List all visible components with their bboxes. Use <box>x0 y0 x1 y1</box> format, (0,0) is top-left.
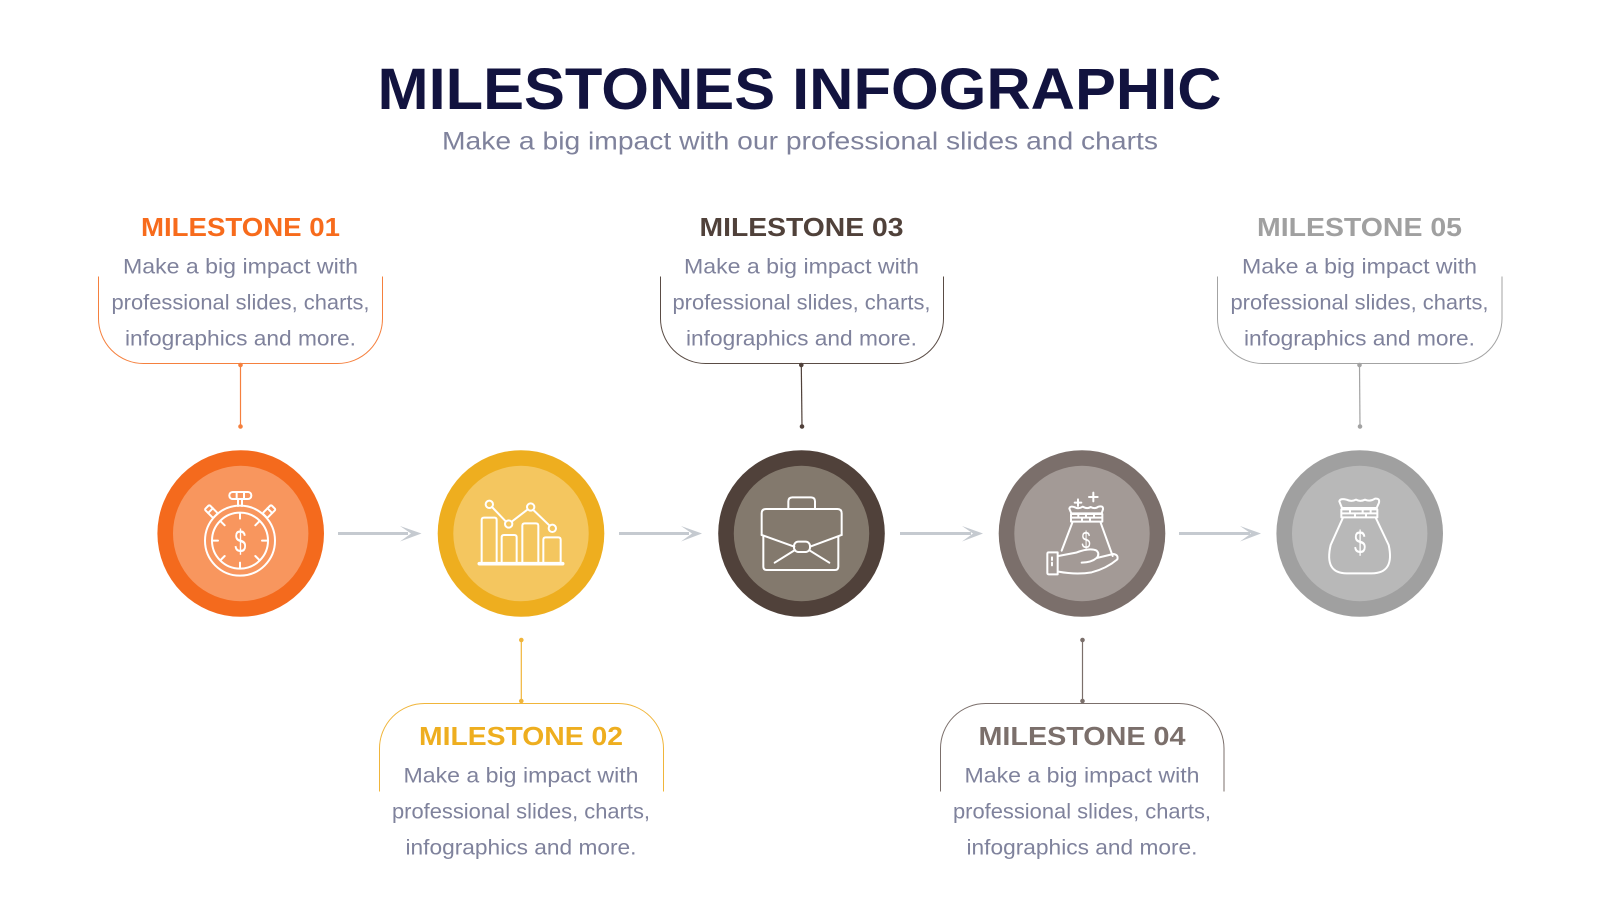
panel: milestone 01 <box>98 212 383 428</box>
subtitle: Make a big impact with our professional slides and charts <box>442 128 1158 156</box>
milestone circle 04 <box>999 450 1165 617</box>
description 05 <box>1230 255 1488 350</box>
connector 05 <box>1358 363 1362 428</box>
description 01: professional slides, charts, <box>112 291 370 314</box>
arrow 1 to 2 <box>338 526 422 542</box>
callout bracket 03 <box>660 276 944 364</box>
callout bracket 02 <box>380 704 664 792</box>
icon: bar chart <box>479 501 563 564</box>
description 05: infographics and more. <box>1244 327 1475 350</box>
title: MILESTONES INFOGRAPHIC <box>378 57 1222 122</box>
description 02: Make a big impact with <box>404 764 638 787</box>
milestone circle 01 <box>157 450 324 617</box>
connector 01 <box>239 363 242 428</box>
arrow 4 to 5 <box>1179 526 1261 542</box>
description 03 <box>672 255 930 350</box>
connector 04 <box>1081 638 1084 703</box>
description 03: professional slides, charts, <box>672 291 930 314</box>
callout bracket 01 <box>98 276 383 364</box>
description 04: Make a big impact with <box>964 764 1200 787</box>
description 01: Make a big impact with <box>123 255 358 278</box>
icon: stopwatch <box>205 492 276 576</box>
connector 02 <box>520 638 523 703</box>
description 04: professional slides, charts, <box>953 800 1211 823</box>
icon: hand holding money bag: $ <box>1081 528 1090 555</box>
description 05: Make a big impact with <box>1242 255 1477 278</box>
arrow 2 to 3 <box>619 526 702 542</box>
description 04: infographics and more. <box>966 836 1198 859</box>
connector 03 <box>800 363 804 428</box>
heading 04: MILESTONE 04 <box>978 721 1186 751</box>
icon: hand holding money bag <box>1047 493 1118 574</box>
panel: milestone 02 <box>380 638 664 859</box>
panel: milestone 03 <box>660 212 944 428</box>
description 03: infographics and more. <box>686 327 917 350</box>
heading 02: MILESTONE 02 <box>419 721 623 751</box>
description 05: professional slides, charts, <box>1230 291 1488 314</box>
description 03: Make a big impact with <box>684 255 919 278</box>
panel: milestone 04 <box>940 638 1224 859</box>
icon: briefcase <box>762 497 842 570</box>
callout bracket 05 <box>1217 276 1502 364</box>
description 02: infographics and more. <box>406 836 636 859</box>
description 02 <box>392 764 650 859</box>
milestone circle 02 <box>438 450 604 617</box>
description 02: professional slides, charts, <box>392 800 650 823</box>
description 01: infographics and more. <box>125 327 356 350</box>
arrow 3 to 4 <box>900 526 983 542</box>
heading 05: MILESTONE 05 <box>1257 212 1462 242</box>
icon: money bag: $ <box>1354 525 1366 561</box>
description 04 <box>953 764 1211 859</box>
panel: milestone 05 <box>1217 212 1502 428</box>
heading 01: MILESTONE 01 <box>141 212 340 242</box>
milestone circle 05 <box>1276 450 1443 617</box>
description 01 <box>112 255 370 350</box>
icon: stopwatch: $ <box>234 523 246 559</box>
callout bracket 04 <box>940 704 1224 792</box>
heading 03: MILESTONE 03 <box>700 212 904 242</box>
icon: money bag <box>1329 499 1390 573</box>
milestone circle 03 <box>718 450 885 617</box>
